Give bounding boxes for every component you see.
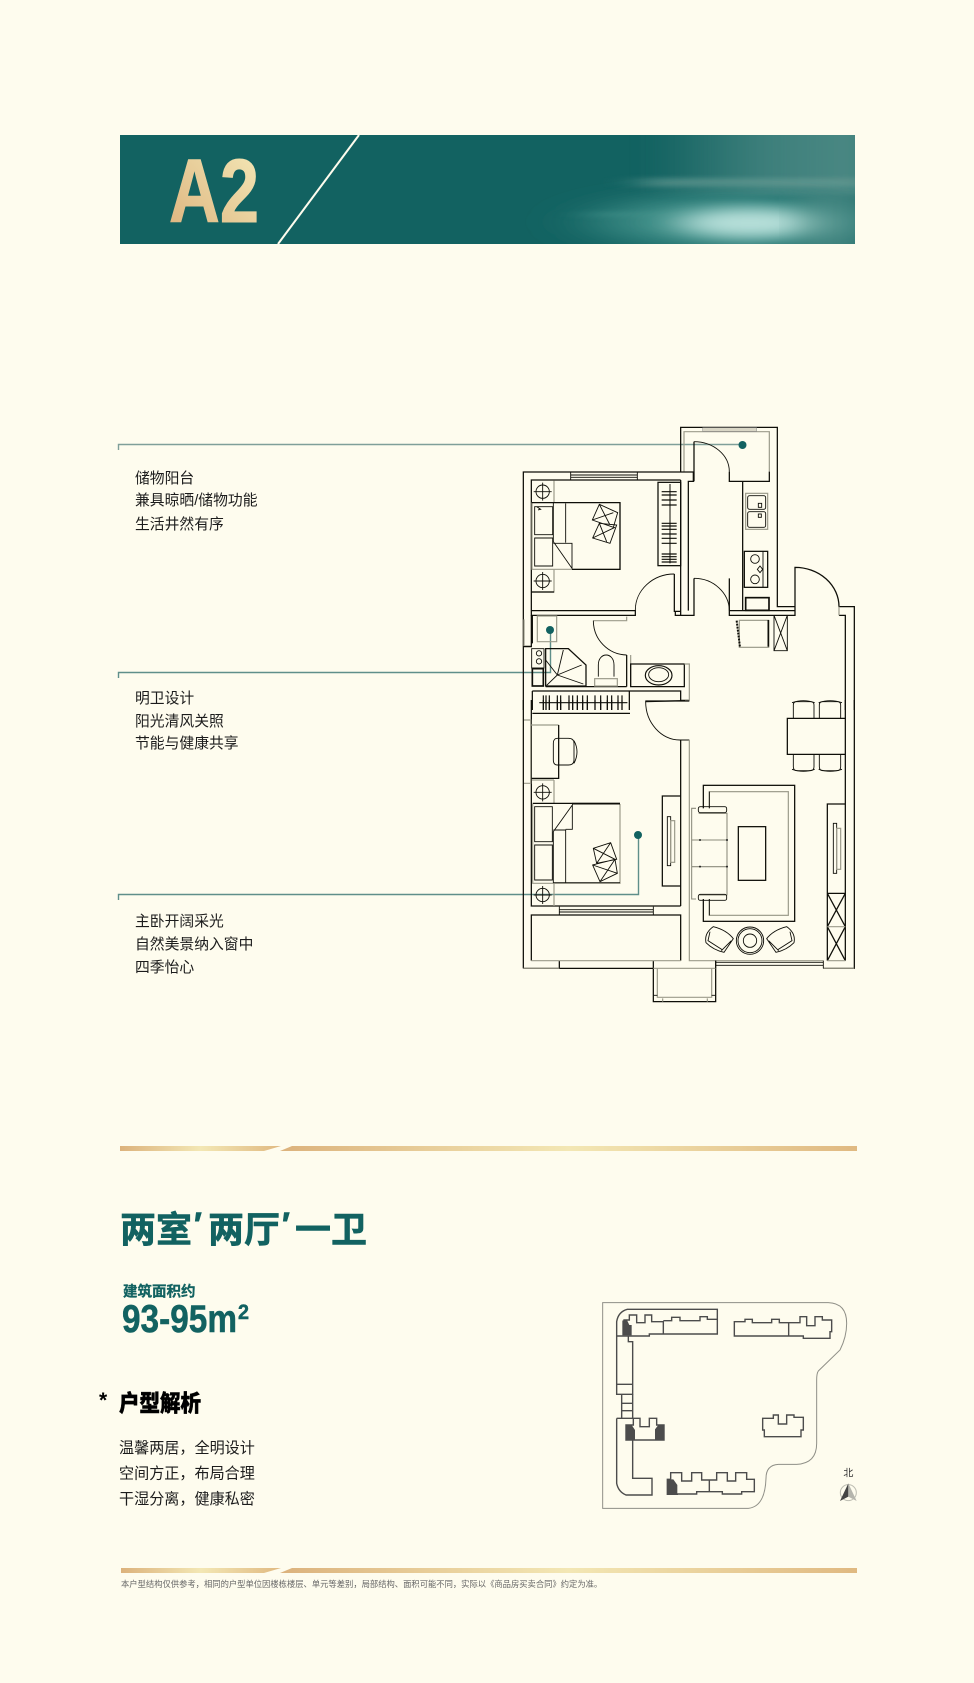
- analysis text: 干湿分离，健康私密: [119, 1491, 255, 1508]
- rug: [703, 785, 795, 921]
- area value: 2: [238, 1301, 249, 1324]
- text: storage balcony: 兼具晾晒/储物功能: [135, 492, 258, 509]
- nightstands and bed: [532, 481, 620, 592]
- text: bright bathroom: [135, 690, 239, 752]
- bathroom: [524, 616, 631, 687]
- floor plan: [523, 427, 854, 1002]
- banner slash: [278, 135, 359, 244]
- coffee table: [738, 827, 766, 880]
- disclaimer: 本户型结构仅供参考，相同的户型单位因楼栋楼层、单元等差别，局部结构、面积可能不同，实际以《商品房买卖合同》约定为准。: [121, 1579, 602, 1589]
- fridge and cabinet: [739, 620, 769, 647]
- area value: 93-95m: [122, 1298, 237, 1341]
- text: bright bathroom: 明卫设计: [135, 690, 194, 707]
- analysis text: 温馨两居，全明设计: [119, 1439, 255, 1457]
- armchairs and side table: [706, 927, 794, 952]
- text: bright bathroom: 节能与健康共享: [135, 735, 239, 752]
- compass: [840, 1468, 857, 1501]
- analysis text: [119, 1439, 255, 1508]
- wardrobe: [658, 482, 681, 566]
- text: master bedroom: 主卧开阔采光: [135, 913, 224, 930]
- building group north-west: [617, 1309, 717, 1394]
- master bed: [536, 786, 549, 799]
- text: storage balcony: 生活井然有序: [135, 516, 224, 533]
- heading: layout: [120, 1206, 367, 1250]
- heading: layout: ′: [192, 1206, 202, 1244]
- heading: layout: 两厅: [208, 1209, 280, 1250]
- analysis text: 空间方正，布局合理: [119, 1466, 255, 1482]
- text: storage balcony: 储物阳台: [135, 470, 194, 487]
- label: floor area: 建筑面积约: [123, 1282, 196, 1300]
- heading: analysis: 户型解析: [119, 1390, 201, 1416]
- compass: 北: [843, 1468, 853, 1480]
- heading: layout: 一卫: [295, 1209, 367, 1250]
- heading: layout: 两室: [120, 1209, 192, 1250]
- TV cabinet living: [827, 804, 845, 961]
- divider bottom: [121, 1568, 857, 1573]
- leader line: master bedroom: [118, 831, 642, 900]
- building east: [763, 1415, 803, 1437]
- leader line: storage balcony: [118, 441, 746, 450]
- dining table: [787, 718, 845, 754]
- site boundary: [603, 1303, 847, 1508]
- text: master bedroom: 自然美景纳入窗中: [135, 935, 253, 953]
- kitchen fixtures: [746, 493, 768, 529]
- floor plan lower half: [523, 700, 854, 1002]
- site plan: [603, 1303, 857, 1508]
- TV unit bedroom: [662, 796, 681, 886]
- building group west: [617, 1394, 664, 1495]
- text: bright bathroom: 阳光清风关照: [135, 713, 224, 730]
- leader line: bright bathroom: [118, 626, 554, 678]
- building north-east: [734, 1317, 832, 1338]
- balcony: [523, 915, 716, 1002]
- text: storage balcony: [135, 470, 258, 533]
- text: master bedroom: 四季怡心: [135, 959, 194, 976]
- sofa: [699, 808, 728, 899]
- desk and chair: [531, 725, 559, 778]
- corridor wardrobe: [532, 691, 685, 710]
- window south: [559, 907, 653, 915]
- window: [571, 472, 637, 480]
- banner title: A2: [169, 142, 259, 242]
- heading: layout: ′: [280, 1206, 290, 1244]
- banner: [120, 135, 855, 244]
- heading: analysis: *: [99, 1389, 108, 1412]
- text: master bedroom: [135, 913, 253, 976]
- divider top: [120, 1146, 857, 1151]
- building south: [667, 1473, 754, 1494]
- floor plan upper half: [523, 427, 854, 710]
